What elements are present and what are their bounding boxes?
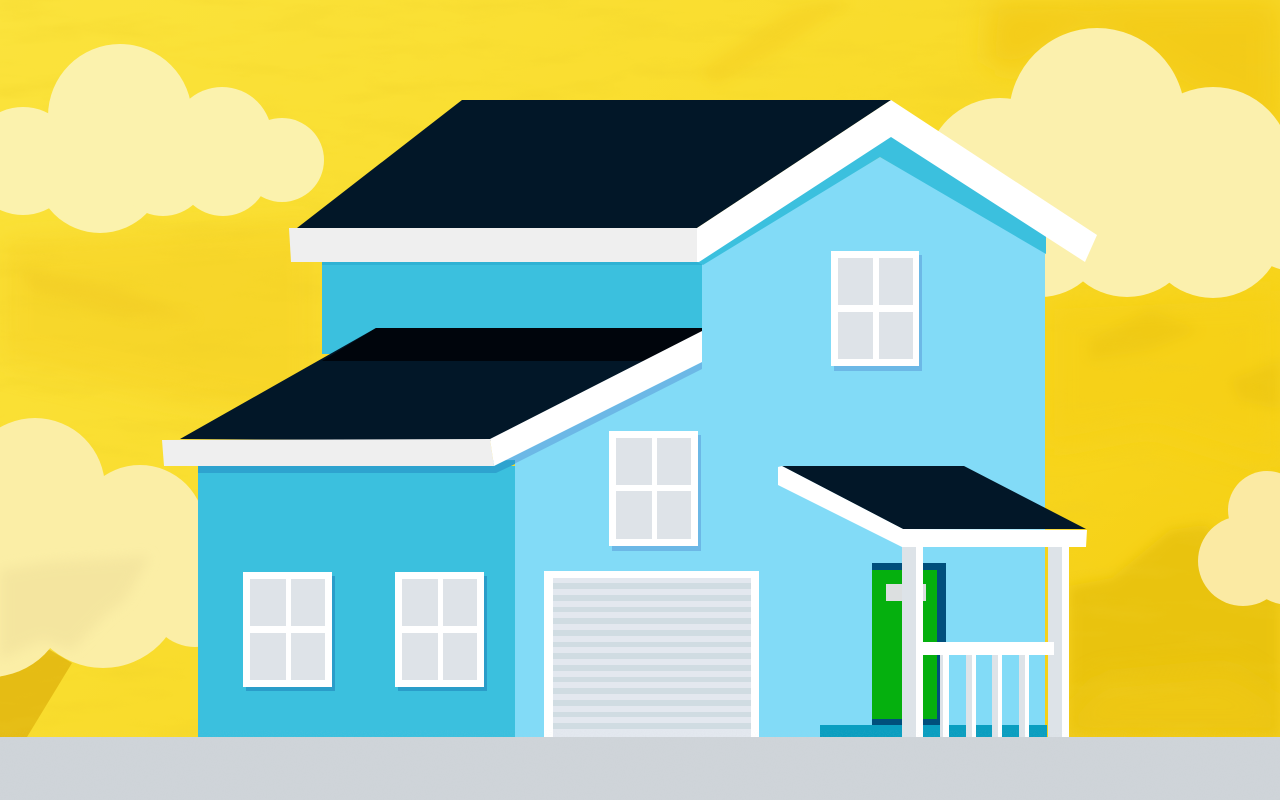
- window: lower left: [243, 572, 335, 691]
- gable underside shade: [697, 135, 1046, 265]
- ground: [0, 737, 1280, 800]
- cloud: top right: [926, 28, 1280, 298]
- porch balusters: [940, 655, 1029, 737]
- cloud shaded brush patch: [0, 556, 150, 660]
- porch left post: [902, 547, 923, 737]
- lower roof shadow on wall: [495, 362, 702, 466]
- gable white trim: [697, 100, 1097, 262]
- window: middle: [609, 431, 701, 551]
- lower roof front fascia: [162, 439, 494, 466]
- lower roof: [162, 328, 702, 473]
- porch step: [820, 725, 1047, 737]
- porch right post: [1048, 547, 1069, 737]
- lower roof side fascia: [490, 331, 702, 466]
- garage door: [544, 571, 759, 737]
- lower left wall: [198, 466, 515, 737]
- window: upper right: [831, 251, 922, 371]
- front door: [872, 563, 946, 725]
- porch roof: [782, 466, 1086, 529]
- upper roof: [289, 100, 1097, 265]
- upper roof front fascia: [289, 228, 697, 262]
- porch roof fascia: [778, 466, 1087, 547]
- porch rail: [917, 642, 1054, 655]
- main front wall: [515, 157, 1045, 737]
- window: lower centre: [395, 572, 487, 691]
- cloud: lower right: [1198, 471, 1280, 606]
- upper storey back wall: [322, 262, 704, 354]
- porch structure: [778, 466, 1087, 737]
- cloud: top left: [0, 44, 324, 233]
- lower roof shadow on teal wall: [198, 460, 515, 473]
- cloud: lower left: [0, 418, 242, 677]
- door handle: [886, 584, 926, 601]
- lower roof dark band: [322, 328, 702, 361]
